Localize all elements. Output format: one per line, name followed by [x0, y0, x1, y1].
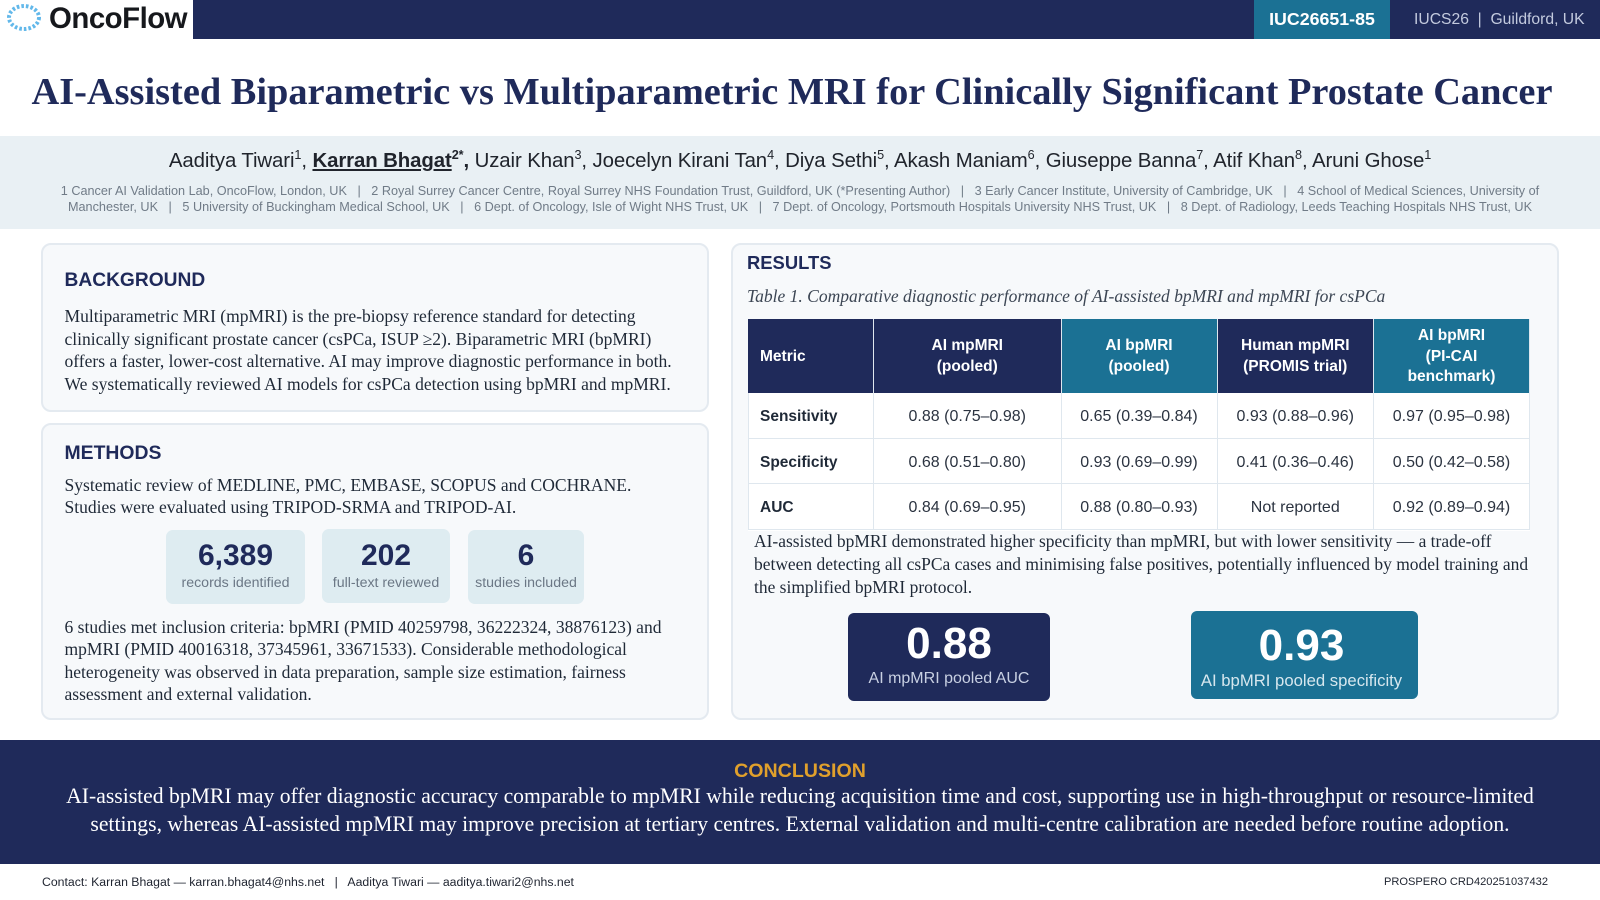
results text: AI-assisted bpMRI demonstrated higher specificity than mpMRI, but with lower sensitivity — a trade-off — [754, 531, 1491, 551]
affiliations — [61, 184, 1540, 214]
results text: between detecting all csPCa cases and minimising false positives, potentially influenced by model training and — [754, 554, 1528, 574]
conclusion text: settings, whereas AI-assisted mpMRI may improve precision at tertiary centres. External validation and multi-centre calibration are needed before routine adoption. — [90, 812, 1510, 836]
background text: offers a faster, lower-cost alternative. AI may improve diagnostic performance in both. — [64, 351, 672, 371]
authors band — [0, 136, 1600, 229]
results text — [754, 531, 1528, 597]
KPI: mpMRI AUC: 0.88 — [906, 619, 992, 668]
stat: studies included: 6 — [518, 539, 534, 572]
abstract id badge: IUC26651-85 — [1269, 9, 1375, 29]
table header: AI bpMRI — [1418, 327, 1485, 344]
row: sensitivity: 0.65 (0.39–0.84) — [1080, 408, 1198, 425]
methods results text — [64, 616, 662, 704]
table header: AI mpMRI — [932, 337, 1003, 354]
KPI: mpMRI AUC — [848, 613, 1050, 701]
KPI: bpMRI specificity: AI bpMRI pooled specificity — [1201, 671, 1402, 690]
stat: records identified — [166, 530, 305, 604]
stat: records identified: 6,389 — [198, 539, 273, 572]
methods results text: 6 studies met inclusion criteria: bpMRI (PMID 40259798, 36222324, 38876123) and — [64, 616, 661, 636]
methods intro — [64, 474, 631, 517]
background text — [64, 306, 672, 394]
table header: benchmark) — [1408, 368, 1495, 385]
row: sensitivity: 0.93 (0.88–0.96) — [1237, 408, 1354, 425]
conclusion text: AI-assisted bpMRI may offer diagnostic accuracy comparable to mpMRI while reducing acquisition time and cost, supporting use in high-throughput or resource-limited — [66, 784, 1534, 808]
header bar — [0, 0, 1600, 38]
footer contact: Contact: Karran Bhagat — karran.bhagat4@nhs.net | Aaditya Tiwari — aaditya.tiwari2@nhs.net — [42, 875, 574, 889]
row: specificity — [748, 439, 1530, 484]
icon: dotted ring — [7, 4, 41, 31]
heading: methods: METHODS — [64, 442, 161, 464]
logo wordmark: OncoFlow — [49, 2, 187, 35]
row: AUC: 0.88 (0.80–0.93) — [1080, 499, 1198, 516]
row: sensitivity — [748, 393, 1530, 439]
row: sensitivity: 0.88 (0.75–0.98) — [909, 408, 1026, 425]
methods results text: assessment and external validation. — [64, 684, 312, 704]
methods results text: heterogeneity was observed in data preparation, sample size estimation, fairness — [64, 662, 626, 682]
methods results text: mpMRI (PMID 40016318, 37345961, 33671533). Considerable methodological — [64, 639, 627, 659]
row: sensitivity: 0.97 (0.95–0.98) — [1393, 408, 1510, 425]
KPI: bpMRI specificity: 0.93 — [1259, 621, 1344, 670]
conclusion heading: CONCLUSION — [734, 760, 866, 782]
background text: We systematically reviewed AI models for csPCa detection using bpMRI and mpMRI. — [64, 374, 671, 394]
row: specificity: 0.41 (0.36–0.46) — [1237, 454, 1354, 471]
conclusion band — [0, 740, 1600, 864]
row: AUC: Not reported — [1251, 499, 1340, 516]
stat: full-text reviewed — [322, 529, 450, 603]
conference label: IUCS26 | Guildford, UK — [1414, 11, 1585, 28]
table header: (pooled) — [1108, 358, 1170, 375]
table caption: Table 1. Comparative diagnostic performance of AI-assisted bpMRI and mpMRI for csPCa — [747, 286, 1385, 306]
row: AUC: AUC — [760, 499, 794, 516]
table header: Metric — [760, 348, 806, 364]
methods intro: Studies were evaluated using TRIPOD-SRMA and TRIPOD-AI. — [64, 497, 516, 517]
affiliations: Manchester, UK | 5 University of Buckingham Medical School, UK | 6 Dept. of Oncology, Isle of Wight NHS Trust, UK | 7 Dept. of Oncology, Portsmouth Hospitals University NHS Trust, UK | 8 Dept. of Radiology, Leeds Teaching Hospitals NHS Trust, UK — [68, 200, 1532, 214]
table header — [748, 319, 1530, 393]
row: specificity: Specificity — [760, 454, 838, 471]
KPI: mpMRI AUC: AI mpMRI pooled AUC — [869, 670, 1029, 687]
table header: (PI-CAI — [1426, 348, 1477, 364]
row: AUC: 0.84 (0.69–0.95) — [909, 499, 1026, 516]
results text: the simplified bpMRI protocol. — [754, 577, 972, 597]
row: AUC — [748, 484, 1530, 530]
title: AI-Assisted Biparametric vs Multiparametric MRI for Clinically Significant Prostate Cancer — [32, 70, 1552, 112]
abstract id badge — [1254, 0, 1390, 38]
stat: studies included — [468, 530, 584, 604]
affiliations: 1 Cancer AI Validation Lab, OncoFlow, London, UK | 2 Royal Surrey Cancer Centre, Royal Surrey NHS Foundation Trust, Guildford, UK (*Presenting Author) | 3 Early Cancer Institute, University of Cambridge, UK | 4 School of Medical Sciences, University of — [61, 184, 1539, 198]
background text: Multiparametric MRI (mpMRI) is the pre-biopsy reference standard for detecting — [64, 306, 636, 326]
row: specificity: 0.68 (0.51–0.80) — [909, 454, 1026, 471]
panel: methods — [41, 423, 709, 720]
panel: results — [731, 243, 1559, 720]
results table — [748, 318, 1530, 530]
stat: full-text reviewed: 202 — [361, 539, 411, 572]
KPI: bpMRI specificity — [1191, 611, 1418, 699]
footer registration: PROSPERO CRD420251037432 — [1384, 876, 1548, 888]
row: AUC: 0.92 (0.89–0.94) — [1393, 499, 1510, 516]
row: specificity: 0.50 (0.42–0.58) — [1393, 454, 1510, 471]
logo: OncoFlow — [0, 0, 193, 38]
background text: clinically significant prostate cancer (csPCa, ISUP ≥2). Biparametric MRI (bpMRI) — [64, 328, 651, 348]
conclusion text — [66, 784, 1534, 836]
panel: background — [41, 243, 709, 412]
row: sensitivity: Sensitivity — [760, 408, 838, 425]
heading: background: BACKGROUND — [64, 270, 205, 291]
stat: full-text reviewed: full-text reviewed — [333, 575, 439, 591]
methods intro: Systematic review of MEDLINE, PMC, EMBASE, SCOPUS and COCHRANE. — [64, 474, 631, 494]
heading: results: RESULTS — [747, 252, 831, 273]
table header: Human mpMRI — [1241, 337, 1350, 354]
authors: Aaditya Tiwari1, Karran Bhagat2*, Uzair Khan3, Joecelyn Kirani Tan4, Diya Sethi5, Akash Maniam6, Giuseppe Banna7, Atif Khan8, Aruni Ghose1 — [169, 148, 1431, 172]
table header: (pooled) — [937, 358, 998, 375]
row: specificity: 0.93 (0.69–0.99) — [1080, 454, 1198, 471]
stat: records identified: records identified — [181, 575, 290, 591]
table header: AI bpMRI — [1105, 337, 1173, 354]
stat: studies included: studies included — [475, 575, 577, 591]
table header: (PROMIS trial) — [1243, 358, 1347, 375]
